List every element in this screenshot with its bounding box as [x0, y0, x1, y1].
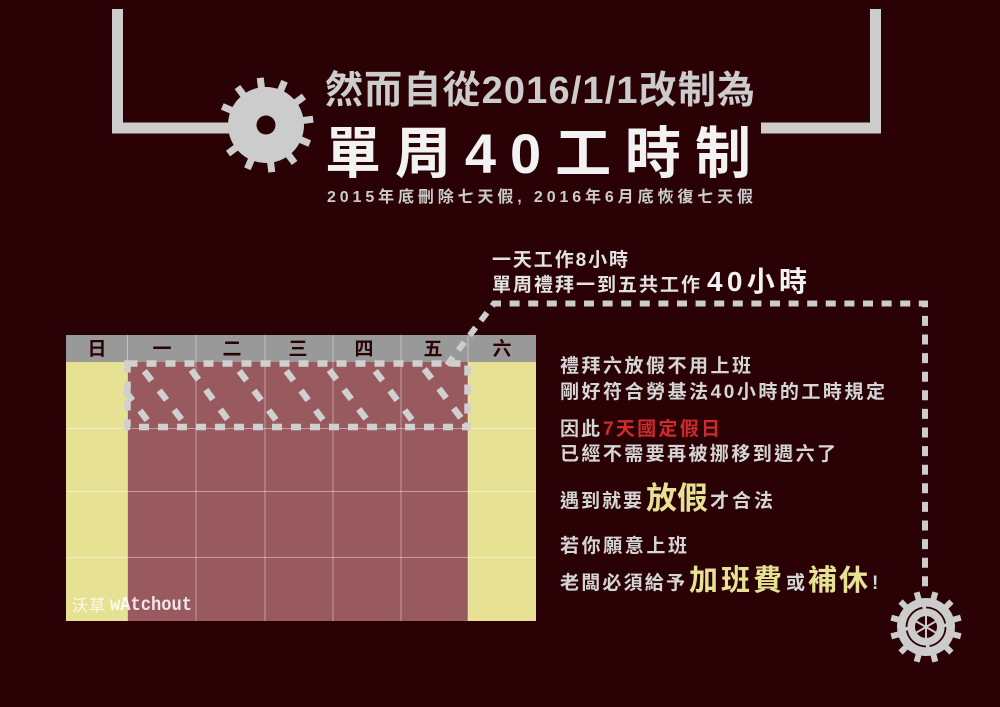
weekday labels: 三	[288, 339, 308, 360]
hatching over work hours	[125, 369, 464, 428]
weekday labels: 日	[87, 339, 107, 360]
text block: must be off: 放假	[646, 481, 708, 516]
header left bracket	[118, 9, 240, 128]
icon: bottom gear	[890, 591, 962, 663]
text block: national holidays: 已經不需要再被挪移到週六了	[560, 443, 836, 465]
title line 1: 然而自從2016/1/1改制為	[325, 70, 755, 112]
weekday labels: 二	[222, 339, 242, 360]
text block: national holidays: 7天國定假日	[603, 417, 720, 440]
text block: overtime pay: 補休	[808, 564, 868, 597]
weekday labels: 一	[152, 339, 172, 360]
weekday labels: 五	[423, 339, 443, 360]
text block: must be off: 才合法	[710, 490, 773, 512]
weekday labels: 六	[492, 338, 512, 360]
title line 2: 單周40工時制	[325, 122, 751, 185]
callout: work hours: 一天工作8小時	[492, 249, 628, 271]
text block: overtime pay: 加班費	[689, 564, 782, 597]
watermark: 沃草	[72, 597, 105, 615]
watermark: wAtchout	[110, 594, 192, 616]
dashed connector line	[447, 304, 925, 592]
text block: national holidays	[560, 417, 836, 465]
text block: overtime pay: 或	[786, 571, 805, 594]
text block: saturday off	[560, 355, 885, 403]
weekday cells	[128, 362, 468, 621]
weekday labels: 四	[354, 339, 374, 360]
text block: saturday off: 剛好符合勞基法40小時的工時規定	[560, 380, 885, 403]
calendar	[66, 335, 536, 621]
text block: national holidays: 因此	[560, 418, 600, 440]
subtitle: 2015年底刪除七天假, 2016年6月底恢復七天假	[327, 187, 753, 206]
callout: work hours: 40小時	[707, 266, 807, 297]
text block: overtime pay	[560, 534, 878, 597]
callout: work hours: 單周禮拜一到五共工作	[492, 274, 700, 296]
text block: overtime pay: 老闆必須給予	[560, 571, 685, 594]
icon: header gear	[221, 77, 314, 173]
callout: work hours	[492, 249, 807, 297]
sunday column	[66, 362, 128, 621]
text block: must be off	[560, 481, 773, 516]
text block: must be off: 遇到就要	[560, 490, 642, 512]
saturday column	[468, 362, 536, 621]
text block: overtime pay: 若你願意上班	[560, 534, 687, 557]
calendar header bar	[66, 335, 536, 362]
text block: saturday off: 禮拜六放假不用上班	[560, 355, 751, 377]
text block: overtime pay: !	[872, 573, 878, 594]
weekday labels	[87, 338, 512, 360]
dashed work hours outline	[128, 364, 468, 427]
header right bracket	[761, 9, 876, 128]
calendar grid lines	[66, 335, 536, 621]
watermark	[72, 594, 192, 616]
